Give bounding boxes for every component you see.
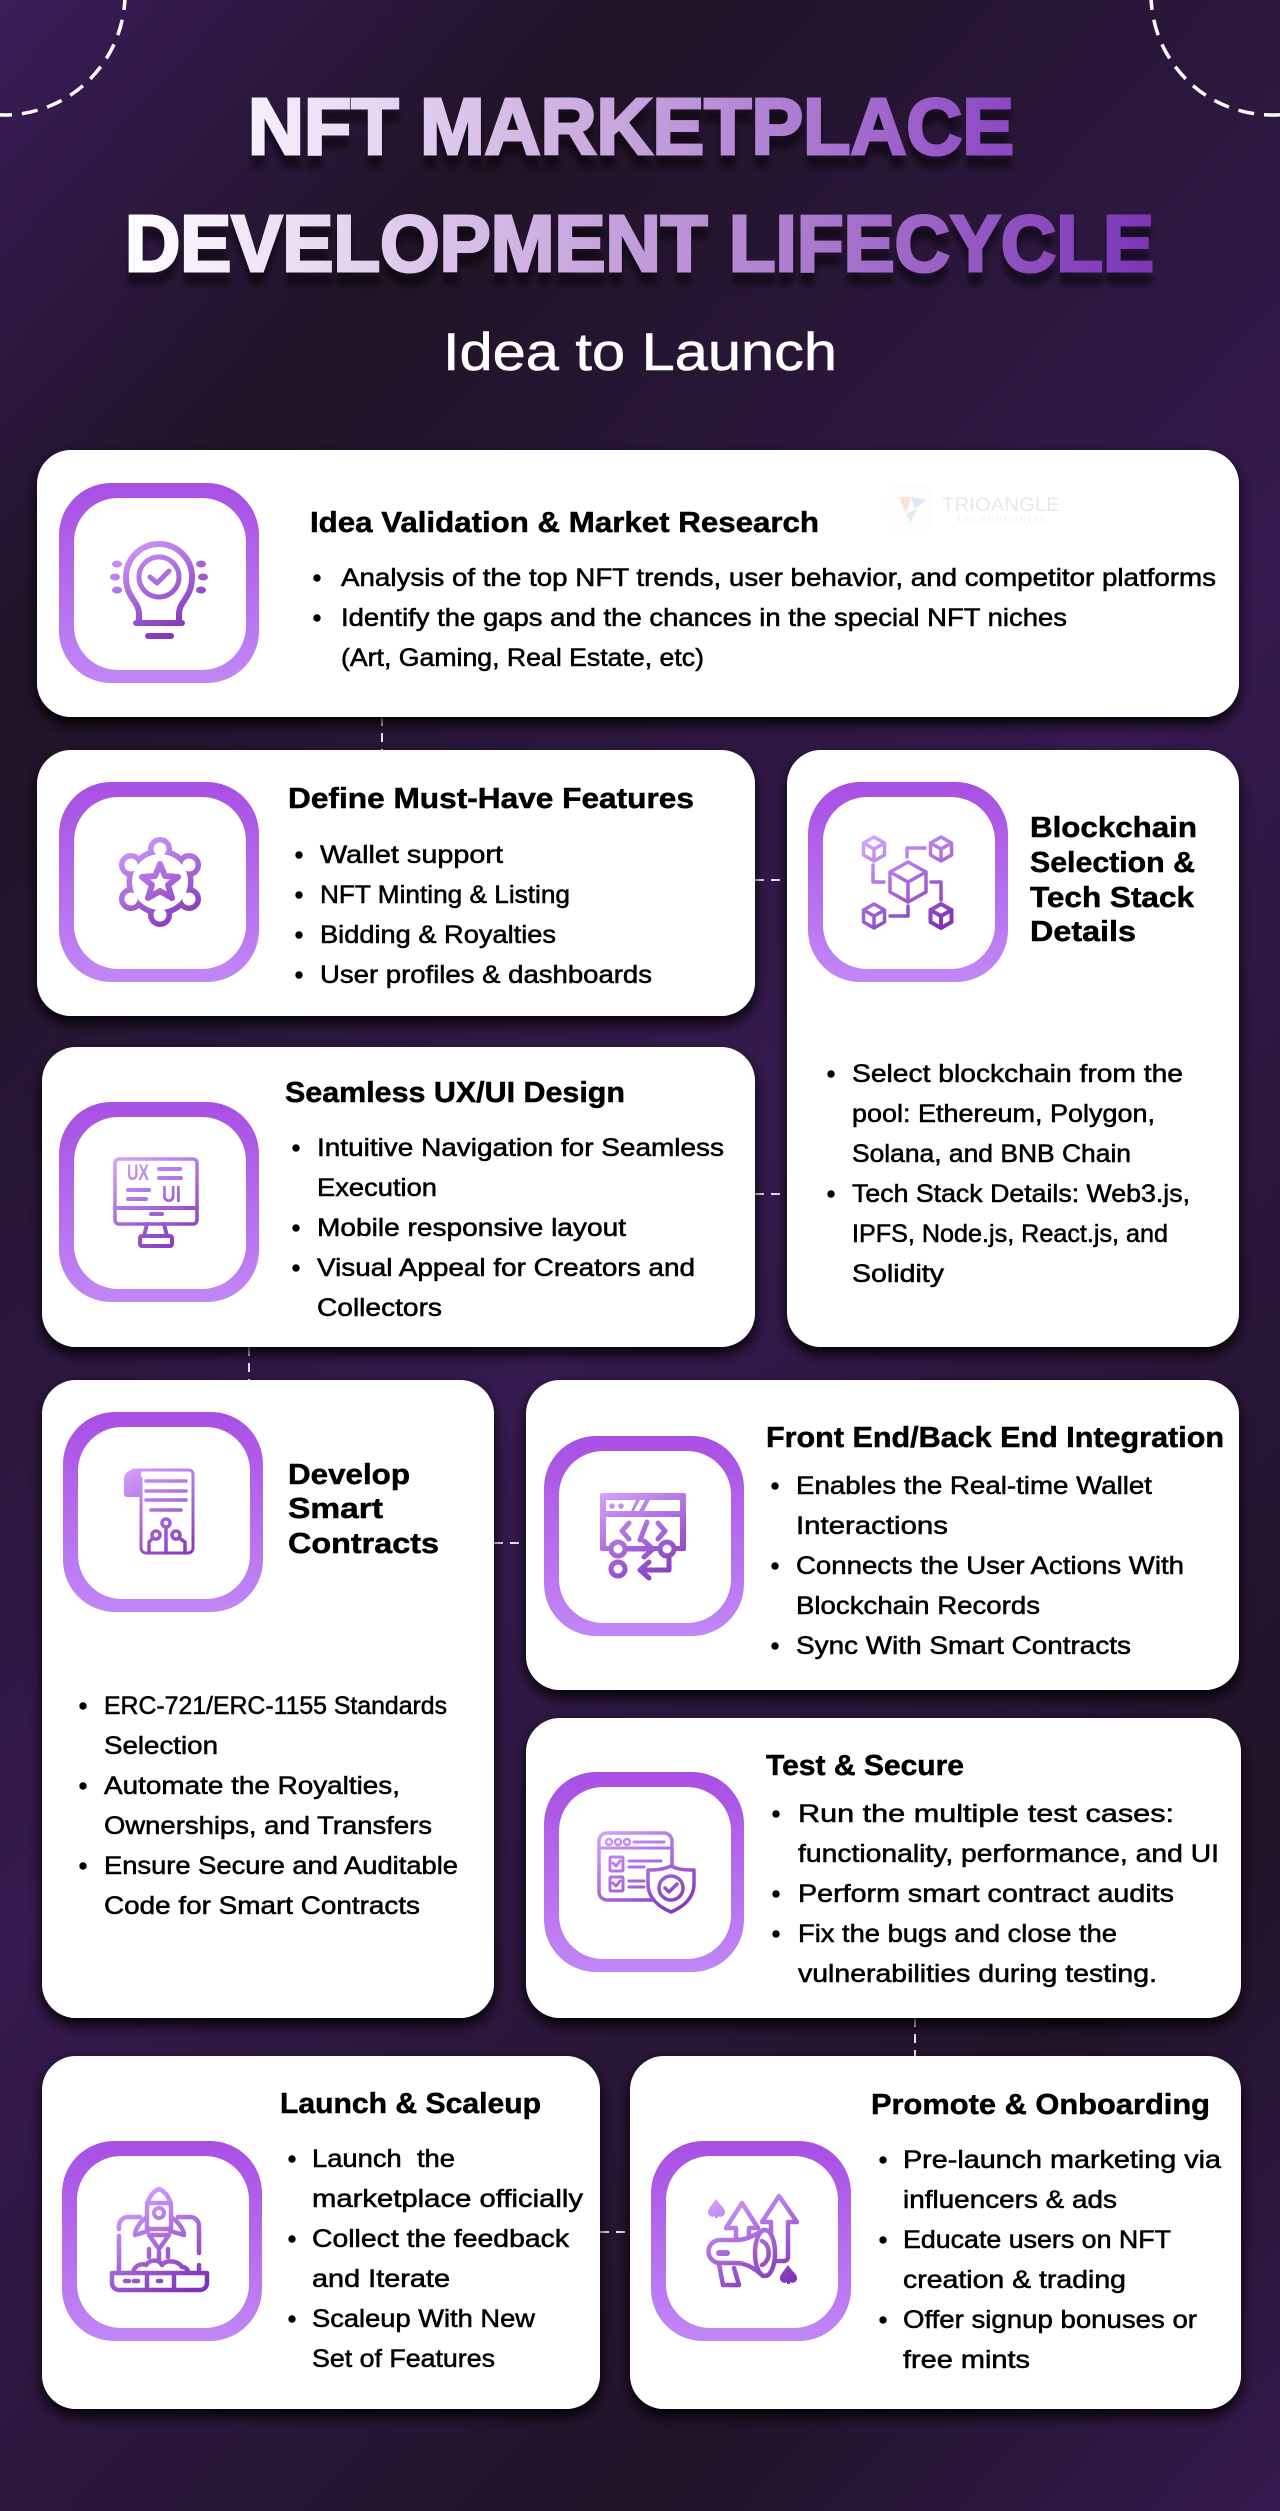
heading: Tech Stack <box>1030 882 1195 914</box>
bullet list: Pre-launch marketing via <box>903 2146 1221 2174</box>
bullet list: Enables the Real-time Wallet <box>796 1472 1152 1500</box>
heading <box>288 1459 439 1560</box>
panel: smart contracts <box>42 1380 494 2018</box>
icon: rocket over laptop <box>62 2141 262 2341</box>
bullet list: influencers & ads <box>903 2186 1117 2214</box>
bullet list <box>313 564 1216 672</box>
bullet list <box>879 2146 1221 2374</box>
bullet list: Sync With Smart Contracts <box>796 1632 1131 1660</box>
icon: UX UI monitor: UI <box>162 1181 181 1207</box>
bullet list: Identify the gaps and the chances in the special NFT niches <box>341 604 1067 632</box>
bullet list: Bidding & Royalties <box>320 921 556 949</box>
bullet list <box>295 841 652 989</box>
bullet list: Tech Stack Details: Web3.js, <box>852 1180 1190 1208</box>
title: DEVELOPMENT LIFECYCLE <box>125 199 1154 288</box>
bullet list: IPFS, Node.js, React.js, and <box>852 1220 1168 1248</box>
bullet list: Connects the User Actions With <box>796 1552 1184 1580</box>
icon: checklist with shield <box>544 1772 744 1972</box>
bullet list: Intuitive Navigation for Seamless <box>317 1134 724 1162</box>
panel: UX UI design <box>42 1047 755 1347</box>
icon: UX UI monitor <box>59 1102 259 1302</box>
bullet list: creation & trading <box>903 2266 1126 2294</box>
panel: blockchain selection <box>787 750 1239 1347</box>
bullet list <box>827 1060 1190 1288</box>
heading: Develop <box>288 1459 410 1491</box>
bullet list: Wallet support <box>320 841 503 869</box>
bullet list: Execution <box>317 1174 437 1202</box>
bullet list: User profiles & dashboards <box>320 961 652 989</box>
logo watermark: TRIOANGLE <box>942 495 1060 516</box>
connector: test to promote <box>914 2018 916 2056</box>
bullet list: Analysis of the top NFT trends, user behavior, and competitor platforms <box>341 564 1216 592</box>
bullet list <box>288 2145 584 2373</box>
panel: launch and scaleup <box>42 2056 600 2409</box>
bullet list <box>772 1800 1219 1988</box>
bullet list: Launch the <box>312 2145 455 2173</box>
icon: megaphone with arrows <box>651 2141 851 2341</box>
heading: Details <box>1030 916 1136 948</box>
connector: promote to launch <box>600 2231 630 2233</box>
bullet list: Selection <box>104 1732 218 1760</box>
bullet list: Fix the bugs and close the <box>798 1920 1117 1948</box>
bullet list: and Iterate <box>312 2265 450 2293</box>
panel: must-have features <box>37 750 755 1016</box>
connector: contracts to integration <box>494 1542 526 1544</box>
decorative dashed circle top left <box>0 0 125 115</box>
heading: Selection & <box>1030 847 1195 879</box>
bullet list: Mobile responsive layout <box>317 1214 626 1242</box>
heading: Front End/Back End Integration <box>766 1422 1224 1454</box>
icon: code window with nodes <box>544 1436 744 1636</box>
decorative dashed circle top right <box>1151 0 1280 115</box>
icon: connected cubes <box>808 782 1008 982</box>
icon: contract scroll <box>63 1412 263 1612</box>
heading: Smart <box>288 1493 383 1525</box>
bullet list: Visual Appeal for Creators and <box>317 1254 695 1282</box>
bullet list: ERC-721/ERC-1155 Standards <box>104 1692 447 1720</box>
bullet list: Ownerships, and Transfers <box>104 1812 432 1840</box>
bullet list: functionality, performance, and UI <box>798 1840 1219 1868</box>
connector: blockchain to UX <box>755 1193 787 1195</box>
bullet list: Set of Features <box>312 2345 495 2373</box>
bullet list: vulnerabilities during testing. <box>798 1960 1157 1988</box>
connector: UX to contracts <box>248 1347 250 1380</box>
logo watermark: TECHNOLOGIES <box>957 515 1045 524</box>
bullet list: Collectors <box>317 1294 442 1322</box>
bullet list: Solana, and BNB Chain <box>852 1140 1131 1168</box>
bullet list: marketplace officially <box>312 2185 584 2213</box>
title <box>125 82 1154 288</box>
bullet list <box>771 1472 1184 1660</box>
subtitle: Idea to Launch <box>443 323 837 382</box>
bullet list: NFT Minting & Listing <box>320 881 570 909</box>
bullet list: free mints <box>903 2346 1030 2374</box>
panel: idea validation <box>37 450 1239 717</box>
heading: Blockchain <box>1030 812 1197 844</box>
bullet list: Code for Smart Contracts <box>104 1892 420 1920</box>
bullet list: Scaleup With New <box>312 2305 536 2333</box>
panel: front end back end integration <box>526 1380 1239 1690</box>
bullet list: Collect the feedback <box>312 2225 570 2253</box>
heading <box>1030 812 1197 948</box>
bullet list: Solidity <box>852 1260 945 1288</box>
bullet list: (Art, Gaming, Real Estate, etc) <box>341 644 704 672</box>
connector: features to blockchain <box>755 879 787 881</box>
heading: Launch & Scaleup <box>280 2088 541 2120</box>
icon: UX UI monitor: UX <box>127 1160 149 1185</box>
bullet list: Perform smart contract audits <box>798 1880 1174 1908</box>
bullet list: Run the multiple test cases: <box>798 1800 1174 1828</box>
connector: idea to features <box>381 717 383 750</box>
heading: Define Must-Have Features <box>288 783 694 815</box>
bullet list <box>292 1134 724 1322</box>
bullet list: pool: Ethereum, Polygon, <box>852 1100 1155 1128</box>
title: NFT MARKETPLACE <box>248 82 1014 171</box>
bullet list: Offer signup bonuses or <box>903 2306 1197 2334</box>
bullet list: Blockchain Records <box>796 1592 1040 1620</box>
icon: gear with star <box>59 782 259 982</box>
heading: Idea Validation & Market Research <box>310 507 819 539</box>
logo watermark <box>887 484 1060 530</box>
bullet list: Select blockchain from the <box>852 1060 1183 1088</box>
icon: light bulb <box>59 483 259 683</box>
heading: Promote & Onboarding <box>871 2089 1210 2121</box>
panel: test and secure <box>526 1718 1241 2018</box>
heading: Contracts <box>288 1528 439 1560</box>
bullet list: Educate users on NFT <box>903 2226 1171 2254</box>
panel: promote and onboarding <box>630 2056 1241 2409</box>
heading: Seamless UX/UI Design <box>285 1077 625 1109</box>
bullet list: Automate the Royalties, <box>104 1772 400 1800</box>
heading: Test & Secure <box>766 1750 964 1782</box>
bullet list: Ensure Secure and Auditable <box>104 1852 458 1880</box>
bullet list <box>79 1692 458 1920</box>
bullet list: Interactions <box>796 1512 948 1540</box>
